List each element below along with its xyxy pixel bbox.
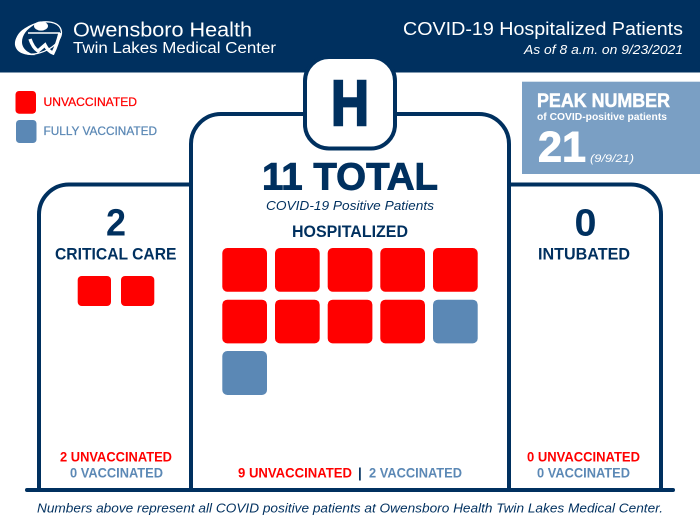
- hospitalized breakdown: 9 UNVACCINATED: [238, 466, 352, 481]
- hospitalized breakdown: 2 VACCINATED: [369, 466, 462, 481]
- icon: hospital logo: [11, 16, 66, 60]
- panel: intubated: INTUBATED: [538, 246, 630, 264]
- callout: peak number: 21: [538, 124, 586, 172]
- total heading: 11 TOTAL: [262, 157, 438, 199]
- legend: UNVACCINATED: [44, 95, 137, 109]
- panel: critical care: [39, 184, 191, 490]
- footnote: Numbers above represent all COVID positive patients at Owensboro Health Twin Lakes Medical Center.: [37, 501, 663, 516]
- panel: critical care: 2 UNVACCINATED: [60, 450, 172, 465]
- callout: peak number: (9/9/21): [590, 153, 634, 165]
- panel: critical care: CRITICAL CARE: [55, 246, 176, 264]
- icon: hospital H badge: H: [331, 67, 369, 139]
- hospitalized breakdown: |: [358, 466, 362, 481]
- icon: hospital H badge: [305, 57, 395, 148]
- logo name: Twin Lakes Medical Center: [73, 40, 276, 57]
- total heading: HOSPITALIZED: [292, 223, 408, 241]
- header title: [403, 19, 683, 57]
- patient squares: [222, 248, 478, 395]
- panel: intubated: 0 UNVACCINATED: [527, 450, 640, 465]
- header band: [0, 0, 700, 72]
- header title: COVID-19 Hospitalized Patients: [403, 19, 683, 39]
- total heading: [262, 157, 438, 241]
- baseline rule: [25, 488, 675, 492]
- header title: As of 8 a.m. on 9/23/2021: [523, 42, 683, 57]
- panel: intubated: [509, 184, 661, 490]
- panel: critical care: 2: [106, 202, 126, 244]
- logo name: Owensboro Health: [73, 18, 252, 42]
- panel: critical care: 0 VACCINATED: [70, 466, 163, 481]
- callout: peak number: PEAK NUMBER: [537, 91, 670, 112]
- total heading: COVID-19 Positive Patients: [266, 198, 435, 213]
- legend: [16, 91, 157, 143]
- panel: intubated: 0: [574, 202, 596, 244]
- panel: intubated: 0 VACCINATED: [537, 466, 630, 481]
- callout: peak number: [522, 82, 700, 174]
- hospitalized breakdown: [238, 466, 462, 481]
- logo name: [73, 18, 276, 57]
- callout: peak number: of COVID-positive patients: [537, 112, 667, 123]
- legend: FULLY VACCINATED: [44, 124, 157, 138]
- panel: hospitalized: [191, 57, 509, 490]
